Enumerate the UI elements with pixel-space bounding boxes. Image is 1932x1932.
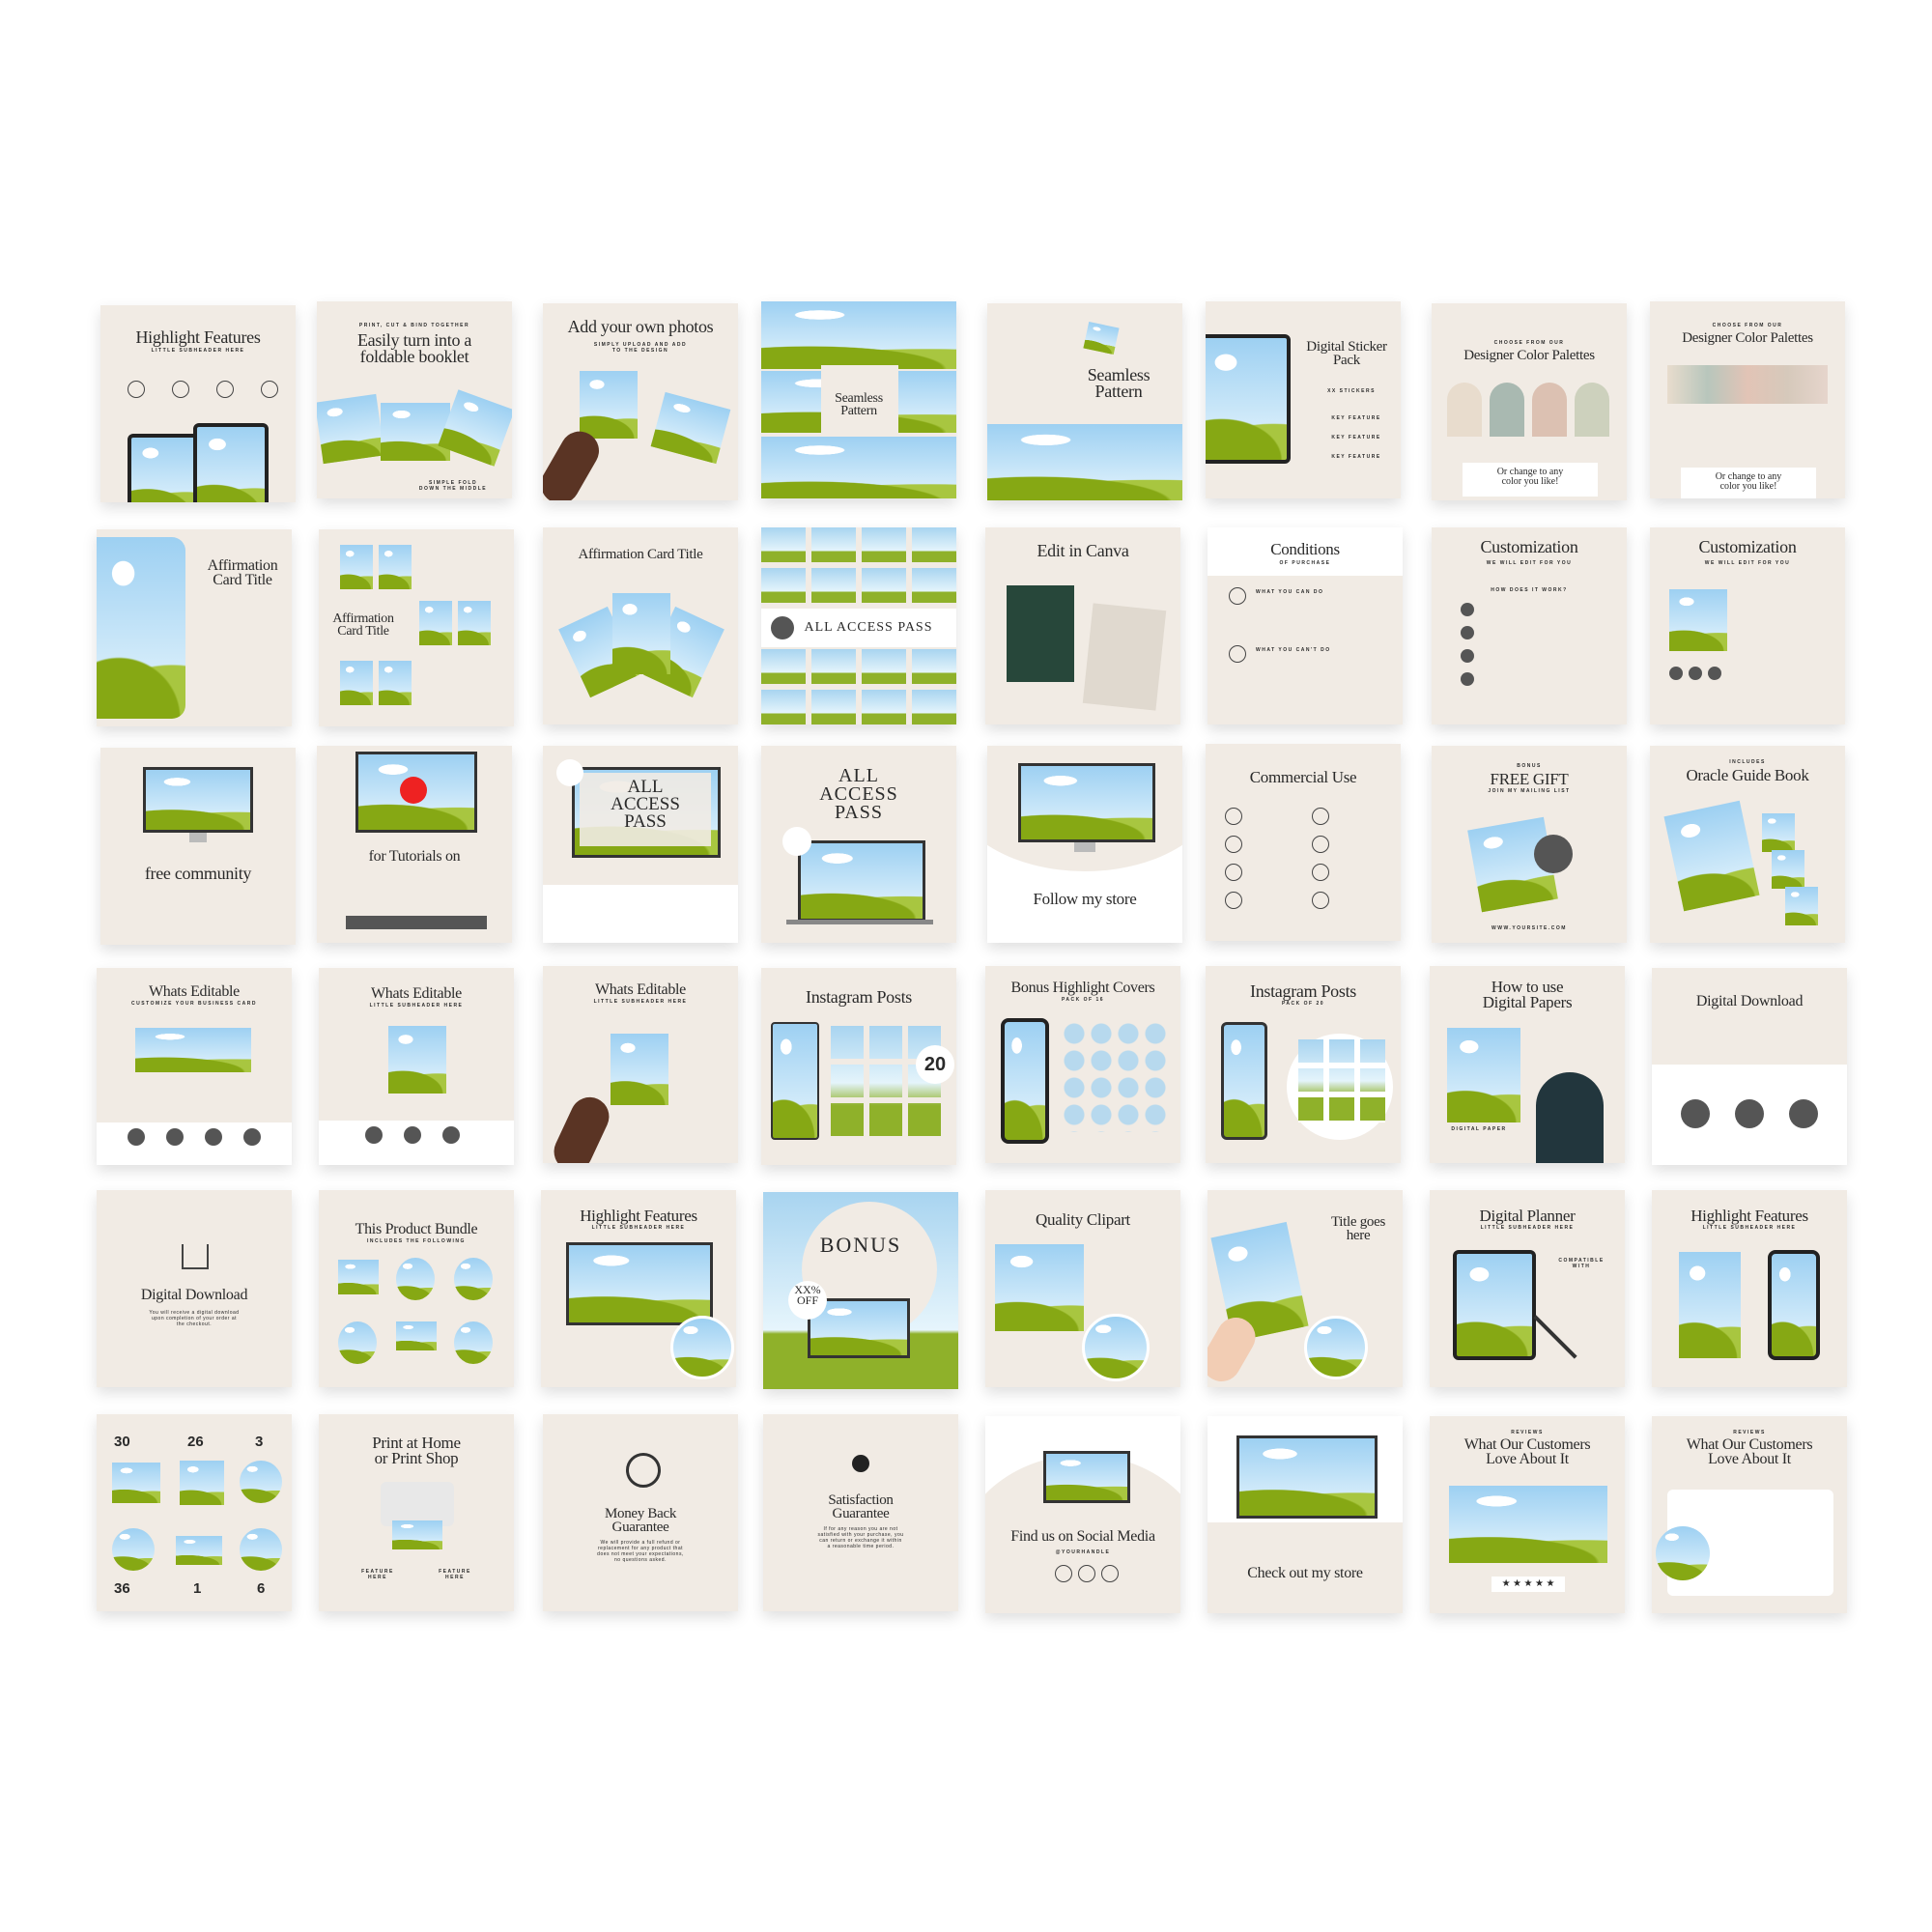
card: stats: 6 [257,1580,265,1597]
card: reviews 2: What Our Customers [1687,1436,1812,1453]
card: free gift: BONUS [1517,763,1542,769]
card: reviews 1: Love About It [1486,1451,1569,1467]
card: conditions: WHAT YOU CAN'T DO [1256,647,1331,653]
card: tutorials [317,746,512,943]
card: color palettes 2: Or change to any [1716,471,1781,482]
card: color palettes 1 [1432,303,1627,500]
card: follow my store [987,746,1182,943]
card: print at home: or Print Shop [375,1449,458,1467]
card: money back: Guarantee [612,1520,668,1535]
card: digital papers: Digital Papers [1483,993,1572,1011]
card: print at home: Print at Home [372,1434,461,1452]
card: commercial use [1206,744,1401,941]
card: color palettes 1: Or change to any [1497,467,1563,477]
card: seamless pattern 2: Pattern [1095,382,1142,401]
card: highlight features monitor [541,1190,736,1387]
card: whats editable 2 [319,968,514,1165]
card: digital papers [1430,966,1625,1163]
card: affirmation card title [97,529,292,726]
card: conditions: OF PURCHASE [1280,560,1330,566]
card: instagram posts pack: PACK OF 20 [1282,1001,1324,1007]
card: title goes here: Title goes [1331,1214,1385,1230]
card: free community: free community [145,864,251,883]
card: digital download 1: Digital Download [1696,993,1803,1009]
card: customization 1: HOW DOES IT WORK? [1491,587,1568,593]
card: bonus: XX% [794,1283,821,1296]
card: whats editable 1 [97,968,292,1165]
card: money back: does not meet your expectations, [597,1551,684,1557]
card: edit in canva: Edit in Canva [1037,541,1129,560]
card: title goes here: here [1347,1228,1370,1243]
card: stats: 1 [193,1580,201,1597]
card: seamless pattern grid [761,301,956,498]
card: customization 1: WE WILL EDIT FOR YOU [1487,560,1572,566]
card: edit in canva [985,527,1180,724]
card: add photos: Add your own photos [568,317,713,336]
card: customization 2 [1650,527,1845,724]
card: digital papers: How to use [1492,978,1563,996]
card: instagram posts 20: 20 [924,1054,946,1075]
card: satisfaction: If for any reason you are not [823,1526,898,1532]
card: highlight features monitor: LITTLE SUBHEADER HERE [592,1225,685,1231]
card: affirmation fan: Affirmation Card Title [579,547,702,562]
card: conditions: WHAT YOU CAN DO [1256,589,1323,595]
card: digital download 2: You will receive a digital download [149,1310,240,1316]
card: all access pass laptop [761,746,956,943]
card: add photos: SIMPLY UPLOAD AND ADD [594,342,687,348]
card: all access pass monitor [543,746,738,943]
card: stats: 3 [255,1434,263,1450]
card: affirmation card 2 [319,529,514,726]
card: highlight features: Highlight Features [135,327,261,347]
card: affirmation card title: Affirmation [208,557,277,574]
card: print at home: FEATURE [361,1569,394,1575]
card: digital sticker pack: KEY FEATURE [1331,454,1381,460]
card: money back: replacement for any product that [598,1546,683,1551]
card: customization 1 [1432,527,1627,724]
card: digital download 2: upon completion of your order at [152,1316,237,1321]
card: highlight features [100,305,296,502]
card: booklet: foldable booklet [360,347,469,366]
card: customization 2: Customization [1698,537,1797,556]
card: digital download 2: the checkout. [177,1321,212,1327]
card: booklet: DOWN THE MIDDLE [419,486,487,492]
card: satisfaction [763,1414,958,1611]
card: oracle guide book [1650,746,1845,943]
card: reviews 1: REVIEWS [1511,1430,1544,1435]
card: digital sticker pack: XX STICKERS [1327,388,1376,394]
card: add photos: TO THE DESIGN [612,348,668,354]
card: seamless pattern 2: Seamless [1088,365,1150,384]
card: quality clipart: Quality Clipart [1036,1210,1130,1229]
card: highlight features monitor: Highlight Features [580,1207,697,1225]
card: social media: Find us on Social Media [1010,1528,1155,1545]
card: free gift: WWW.YOURSITE.COM [1492,925,1567,931]
card: digital planner: Digital Planner [1480,1207,1575,1225]
card: whats editable 3: LITTLE SUBHEADER HERE [594,999,687,1005]
card: all access pass monitor: ACCESS [611,794,680,814]
card: whats editable 1: Whats Editable [149,983,240,1000]
card: all access pass laptop: ACCESS [819,783,898,805]
card: title goes here [1208,1190,1403,1387]
card: tutorials: for Tutorials on [369,848,460,865]
card: seamless pattern grid: Pattern [840,404,877,418]
card: satisfaction: Satisfaction [828,1492,894,1508]
card: digital sticker pack: Pack [1333,353,1360,368]
card: bonus highlight covers [985,966,1180,1163]
card: commercial use: Commercial Use [1250,768,1356,786]
card: affirmation card title: Card Title [213,572,272,588]
card: instagram posts 20: Instagram Posts [806,987,912,1007]
card: color palettes 1: Designer Color Palettes [1463,348,1595,363]
card: whats editable 1: CUSTOMIZE YOUR BUSINESS CARD [131,1001,257,1007]
card: digital sticker pack: KEY FEATURE [1331,415,1381,421]
card: digital planner: WITH [1573,1264,1590,1269]
card: reviews 2: Love About It [1708,1451,1791,1467]
card: customization 1: Customization [1480,537,1578,556]
card: add photos [543,303,738,500]
card: bonus highlight covers: PACK OF 16 [1062,997,1104,1003]
card: oracle guide book: INCLUDES [1729,759,1766,765]
card: stats [97,1414,292,1611]
card: social media: @YOURHANDLE [1056,1549,1110,1555]
card: customization 2: WE WILL EDIT FOR YOU [1705,560,1790,566]
card: all access pass grid [761,527,956,724]
card: money back [543,1414,738,1611]
card: free gift [1432,746,1627,943]
card: check out my store [1208,1416,1403,1613]
card: reviews 1: ★ ★ ★ ★ ★ [1502,1578,1554,1589]
card: bonus: OFF [797,1293,818,1307]
card: digital planner: LITTLE SUBHEADER HERE [1481,1225,1574,1231]
card: satisfaction: a reasonable time period. [828,1544,894,1549]
card: product bundle [319,1190,514,1387]
card: digital planner [1430,1190,1625,1387]
card: reviews 2: REVIEWS [1733,1430,1766,1435]
card: color palettes 2: CHOOSE FROM OUR [1713,323,1782,328]
card: stats: 30 [114,1434,130,1450]
card: money back: no questions asked. [614,1557,667,1563]
card: free community [100,748,296,945]
card: all access pass laptop: PASS [835,802,883,823]
card: bonus [763,1192,958,1389]
card: conditions [1208,527,1403,724]
card: booklet: Easily turn into a [357,330,471,350]
card: bonus highlight covers: Bonus Highlight Covers [1011,980,1154,996]
card: print at home [319,1414,514,1611]
card: stats: 36 [114,1580,130,1597]
card: all access pass grid: ALL ACCESS PASS [804,620,933,635]
card: digital download 2 [97,1190,292,1387]
card: all access pass monitor: PASS [624,811,667,832]
card: all access pass laptop: ALL [838,765,879,786]
card: all access pass monitor: ALL [628,777,663,797]
card: digital sticker pack: Digital Sticker [1306,339,1387,355]
card: check out my store: Check out my store [1247,1565,1363,1581]
card: satisfaction: can return or exchange it within [819,1538,902,1544]
card: affirmation card 2: Affirmation [332,611,394,626]
card: affirmation fan [543,527,738,724]
card: highlight features devices: LITTLE SUBHEADER HERE [1703,1225,1796,1231]
card: digital planner: COMPATIBLE [1558,1258,1605,1264]
card: quality clipart [985,1190,1180,1387]
card: booklet: PRINT, CUT & BIND TOGETHER [359,323,469,328]
card: product bundle: INCLUDES THE FOLLOWING [367,1238,466,1244]
card: whats editable 3 [543,966,738,1163]
card: social media [985,1416,1180,1613]
card: whats editable 3: Whats Editable [595,981,686,998]
card: highlight features devices [1652,1190,1847,1387]
card: instagram posts pack: Instagram Posts [1250,981,1356,1001]
card: reviews 1: What Our Customers [1464,1436,1590,1453]
card: stats: 26 [187,1434,204,1450]
card: money back: We will provide a full refund or [601,1540,680,1546]
card: satisfaction: satisfied with your purchase, you [817,1532,904,1538]
card: booklet [317,301,512,498]
card: free gift: FREE GIFT [1491,770,1568,788]
card: whats editable 2: LITTLE SUBHEADER HERE [370,1003,463,1009]
card: digital papers: DIGITAL PAPER [1451,1126,1507,1132]
card: seamless pattern 2 [987,303,1182,500]
card: color palettes 1: CHOOSE FROM OUR [1494,340,1564,346]
card: product bundle: This Product Bundle [355,1221,477,1237]
card: follow my store: Follow my store [1034,890,1136,908]
card: highlight features devices: Highlight Features [1690,1207,1808,1225]
card: digital download 2: Digital Download [141,1287,247,1303]
card: digital download 1 [1652,968,1847,1165]
card: satisfaction: Guarantee [833,1506,889,1521]
card: color palettes 2: color you like! [1720,481,1776,492]
card: print at home: FEATURE [439,1569,471,1575]
card: money back: Money Back [605,1506,676,1521]
card: color palettes 2: Designer Color Palettes [1682,330,1813,346]
card: whats editable 2: Whats Editable [371,985,462,1002]
card: color palettes 2 [1650,301,1845,498]
card: oracle guide book: Oracle Guide Book [1686,766,1809,784]
card: affirmation card 2: Card Title [337,624,389,639]
card: instagram posts pack [1206,966,1401,1163]
card: conditions: Conditions [1270,540,1340,558]
card: instagram posts 20 [761,968,956,1165]
card: color palettes 1: color you like! [1502,476,1558,487]
card: highlight features: LITTLE SUBHEADER HERE [152,348,244,354]
card: print at home: HERE [368,1575,387,1580]
card: reviews 2 [1652,1416,1847,1613]
card: print at home: HERE [445,1575,465,1580]
card: seamless pattern grid: Seamless [835,391,883,406]
card: digital sticker pack: KEY FEATURE [1331,435,1381,440]
card: bonus: BONUS [820,1233,901,1257]
card: booklet: SIMPLE FOLD [429,480,477,486]
card: reviews 1 [1430,1416,1625,1613]
card: free gift: JOIN MY MAILING LIST [1488,788,1571,794]
card: digital sticker pack [1206,301,1401,498]
